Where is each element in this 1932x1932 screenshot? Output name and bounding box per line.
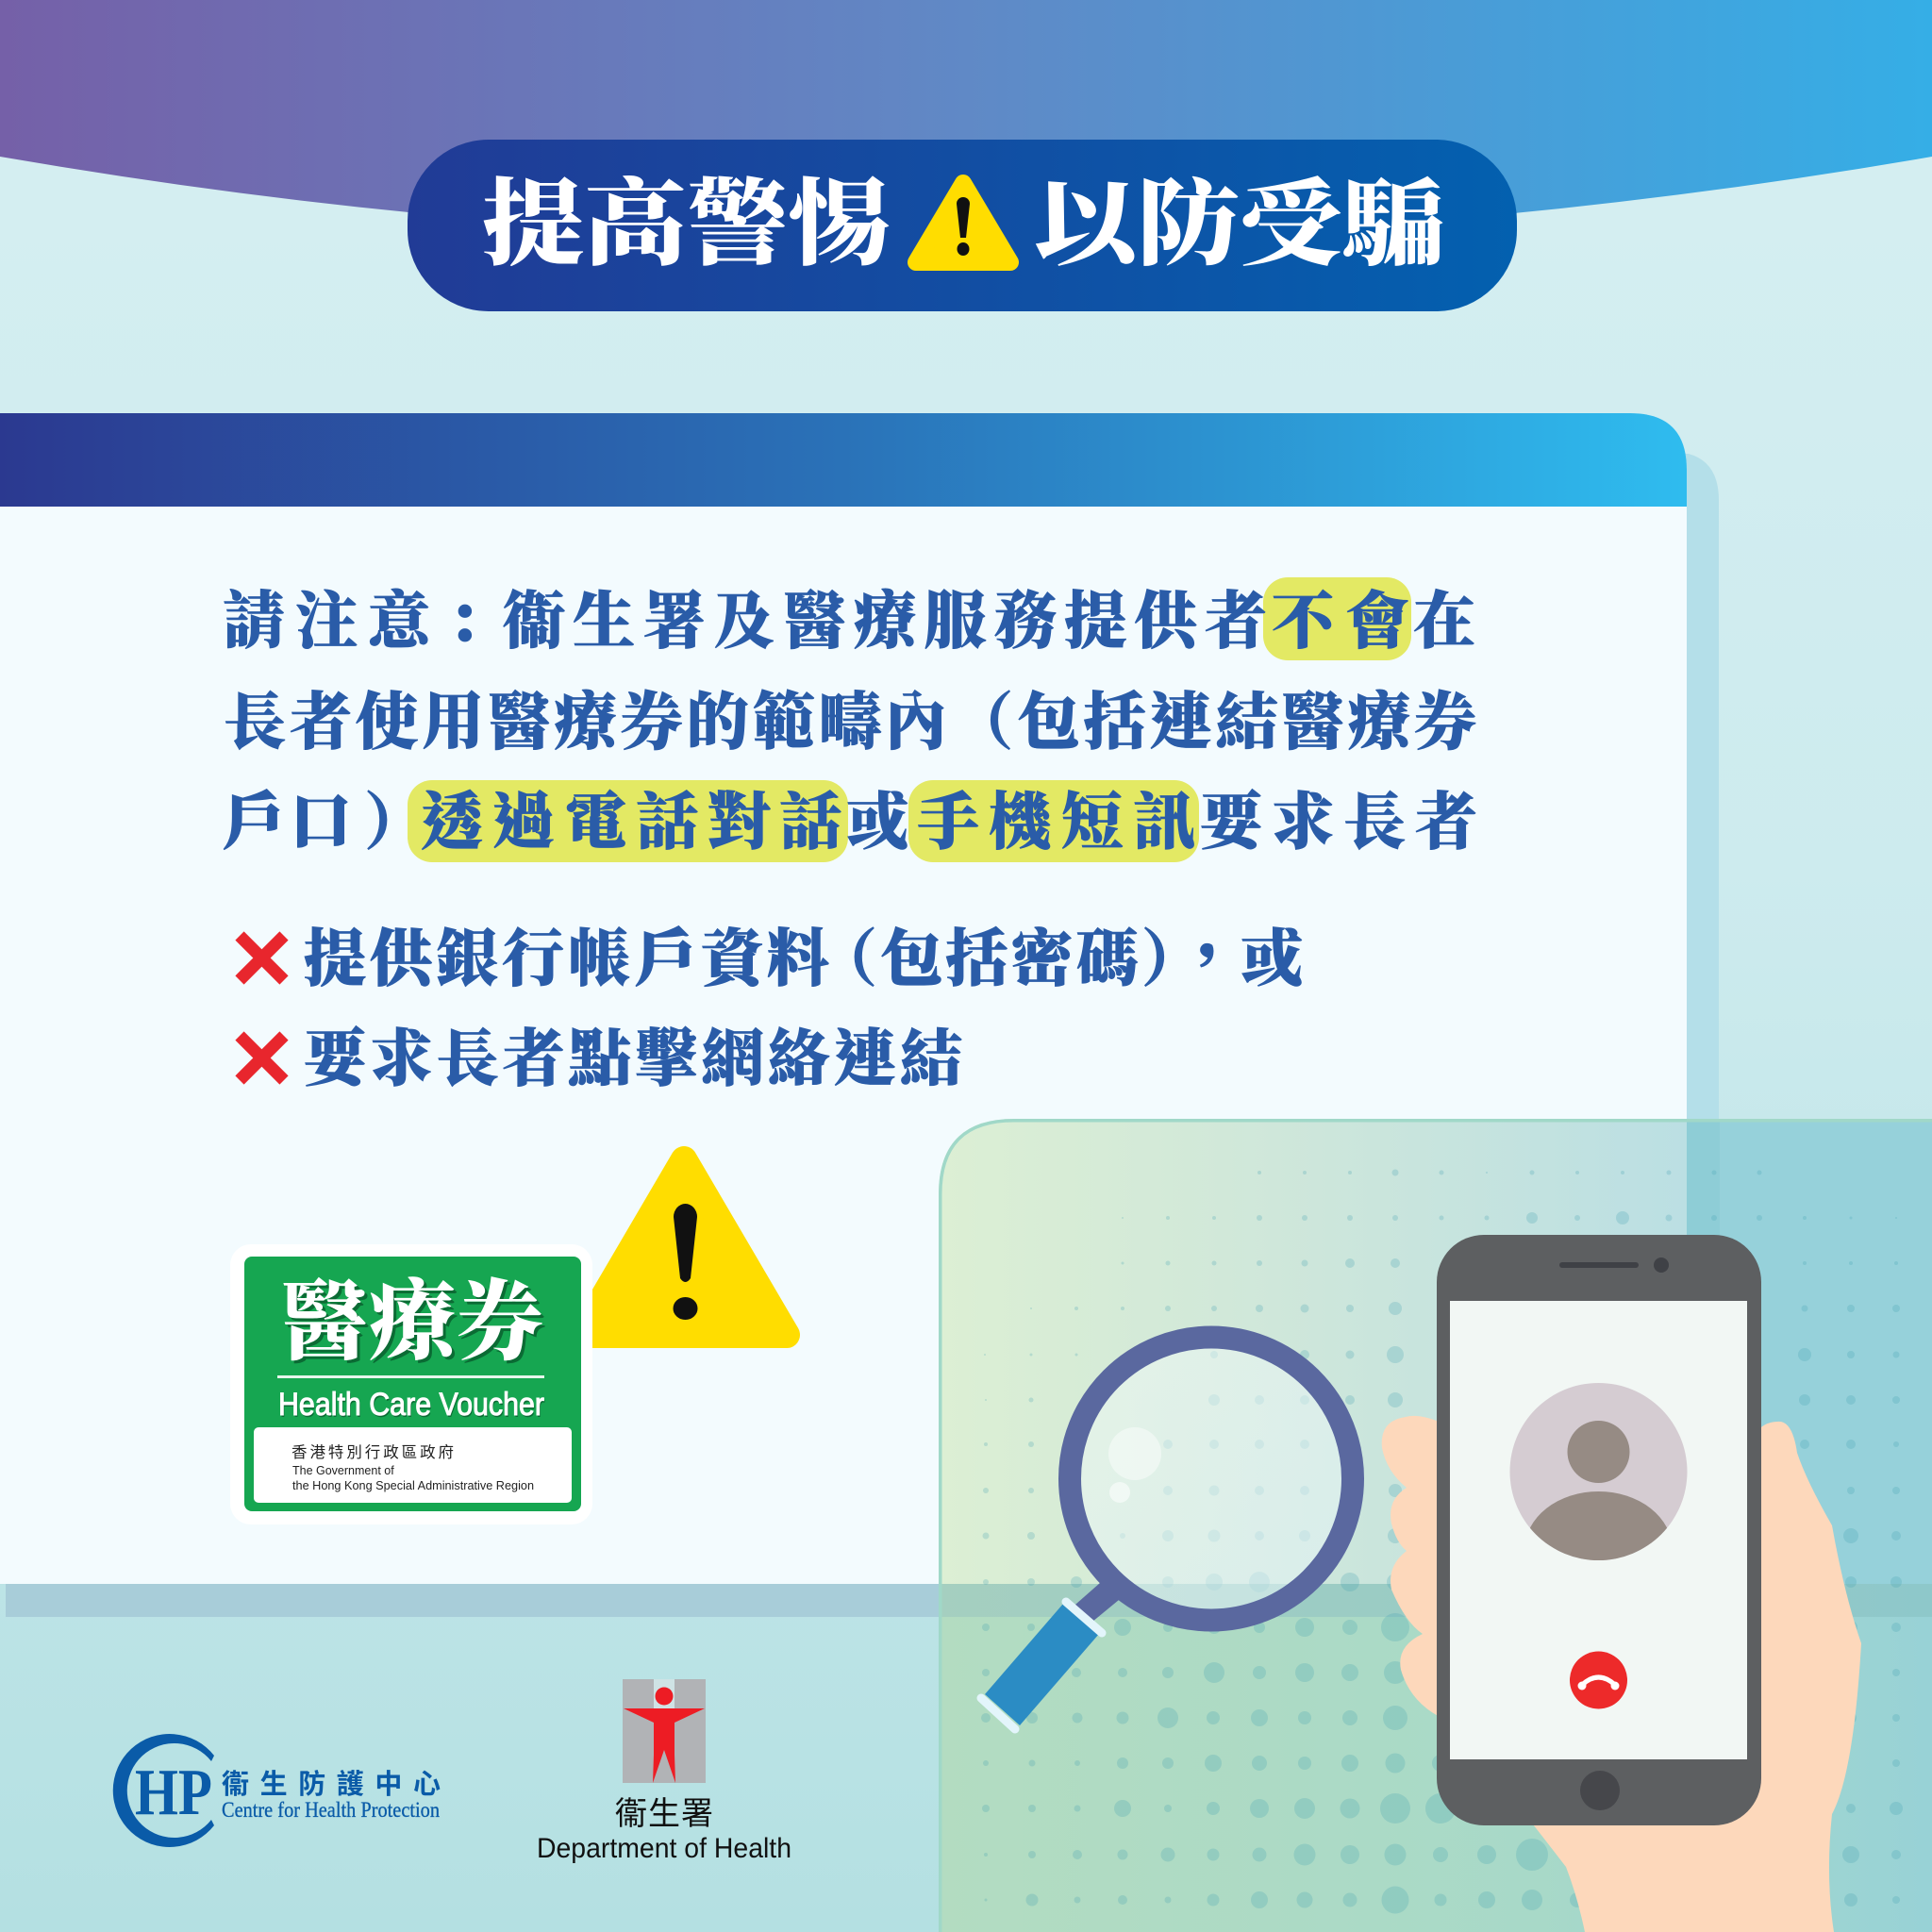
illustration: hand <box>1382 1416 1861 1932</box>
list item 2 <box>240 1008 962 1098</box>
phone screen <box>1450 1301 1747 1759</box>
panel shadow <box>6 454 1719 1617</box>
line 1: 不會 <box>1272 571 1408 660</box>
line 1 <box>223 571 1475 660</box>
DH english name: Department of Health <box>537 1833 791 1864</box>
highlight: 不會 <box>1263 577 1411 660</box>
voucher title: 醫療券 <box>281 1253 543 1377</box>
line 3 <box>223 772 1477 861</box>
bottom panel shadow strip <box>6 1584 1421 1617</box>
line 3: 透過電話對話 <box>421 772 841 861</box>
list text 1: 提供銀行帳戶資料 <box>304 908 829 998</box>
title text right: 以防受騙 <box>1034 148 1445 284</box>
notice paragraph <box>223 571 1477 861</box>
line 3: 手機短訊 <box>917 772 1195 861</box>
icon: hang up button <box>1570 1651 1627 1709</box>
CHP letters: HP <box>135 1757 212 1829</box>
list text 1: （包括密碼），或 <box>815 908 1303 998</box>
phone speaker <box>1559 1262 1639 1268</box>
caller avatar <box>1509 1383 1687 1560</box>
voucher title shadow: 醫療券 <box>284 1256 546 1380</box>
line 3: 或 <box>846 772 908 861</box>
magnifier caps <box>981 1602 1102 1729</box>
illustration panel <box>939 1116 1932 1932</box>
line 3: ） <box>364 772 426 861</box>
voucher government chinese: 香港特別行政區政府 <box>291 1440 454 1462</box>
illustration: smartphone <box>1437 1235 1761 1825</box>
title text left: 提高警惕 <box>482 148 891 284</box>
voucher government english: the Hong Kong Special Administrative Region <box>292 1479 534 1492</box>
logo: Centre for Health Protection <box>113 1734 441 1847</box>
title pill <box>408 140 1517 311</box>
logo: Department of Health <box>537 1679 791 1864</box>
magnifier stem <box>1068 1583 1119 1626</box>
line 3: 要求長者 <box>1200 772 1477 861</box>
DH chinese name: 衞生署 <box>615 1788 713 1834</box>
main notice panel <box>0 413 1687 1584</box>
icon: red cross <box>240 1036 284 1080</box>
panel header band <box>0 413 1687 507</box>
icon: title warning triangle <box>916 183 1010 262</box>
CHP english name: Centre for Health Protection <box>222 1798 440 1822</box>
icon: large warning triangle <box>581 1159 787 1335</box>
list text 1 <box>304 908 1303 998</box>
line 1: 衞生署及醫療服務提供者 <box>503 571 1267 660</box>
voucher english name: Health Care Voucher <box>278 1387 544 1423</box>
line 3: 戶口 <box>223 772 352 861</box>
magnifier handle <box>985 1604 1099 1725</box>
voucher government english: The Government of <box>292 1464 394 1477</box>
line 1: 在 <box>1413 571 1475 660</box>
phone camera <box>1654 1257 1669 1273</box>
line 1: 請注意 <box>223 571 435 660</box>
icon: red cross <box>240 936 284 980</box>
CHP chinese name: 衞生防護中心 <box>222 1762 441 1802</box>
magnifier lens <box>1070 1338 1353 1621</box>
line 1: ： <box>447 571 509 660</box>
list text 2: 要求長者點擊網絡連結 <box>304 1008 962 1098</box>
list item 1 <box>240 908 1303 998</box>
line 2: 長者使用醫療券的範疇內（包括連結醫療券 <box>224 672 1476 761</box>
header curved gradient <box>0 0 1932 240</box>
halftone dots <box>981 1170 1903 1913</box>
phone home button <box>1580 1771 1620 1810</box>
voucher english shadow: Health Care Voucher <box>279 1389 545 1424</box>
icon: magnifying glass <box>981 1338 1353 1729</box>
highlight: 手機短訊 <box>908 780 1199 862</box>
highlight: 透過電話對話 <box>408 780 848 862</box>
health care voucher logo <box>230 1244 592 1524</box>
